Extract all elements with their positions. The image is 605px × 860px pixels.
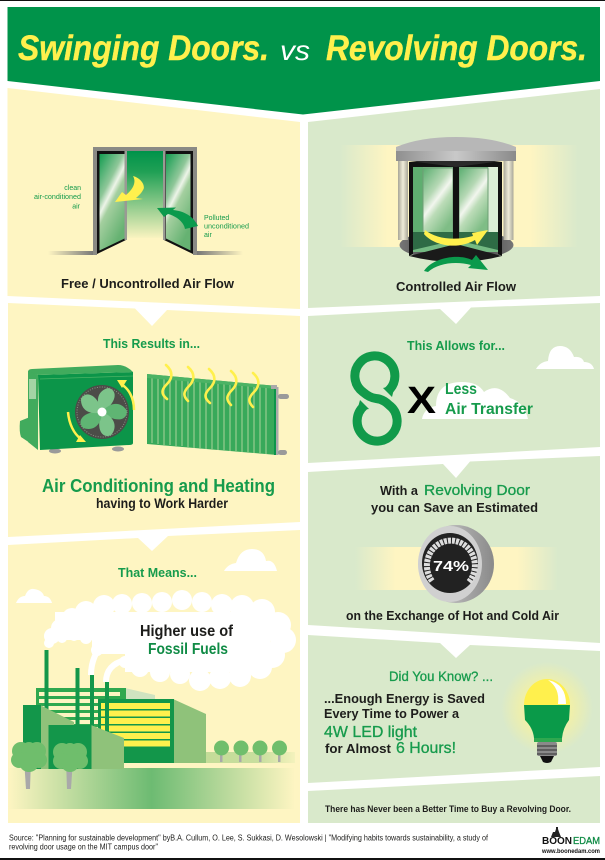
subheading: This Allows for... [407,338,505,353]
text: every time: Every Time to Power a [324,706,460,721]
label: polluted air: air [204,232,212,239]
text: air transfer: Air Transfer [445,401,533,418]
icon: swinging doors [48,147,243,255]
arrow: yellow flow [424,230,488,246]
text: for almost: for Almost [325,741,392,756]
subheading: That Means... [118,565,197,580]
logo: boon edam: BOON [542,836,572,847]
text: 6 hours: 6 Hours! [396,740,456,757]
source note: Source: "Planning for sustainable development" byB.A. Cullum, O. Lee, S. Sukkasi, D. Wesolowski | "Modifying habits towards sustainability, a study of [9,834,489,842]
text: revolving door: Revolving Door [424,482,530,499]
caption: Controlled Air Flow [396,279,517,294]
header banner [8,7,600,114]
multiplication sign: X [407,380,437,422]
cloud: top left [16,589,52,603]
icon: radiator [147,365,289,455]
label: clean air: air [72,204,81,210]
label: clean air: clean [64,185,81,192]
panel: that means [8,530,300,823]
caption: Free / Uncontrolled Air Flow [61,276,235,291]
panel: did you know [308,635,600,783]
title: swinging doors: Swinging Doors. [18,29,269,68]
text: on the exchange: on the Exchange of Hot and Cold Air [346,608,559,623]
text: higher use of: Higher use of [140,623,234,640]
subheading: Did You Know? ... [389,669,493,684]
icon: 74 percent dial: 74% [433,558,469,575]
heat waves [162,365,258,407]
arrows: fan rotation [121,384,134,410]
logo: boon edam: EDAM [573,836,600,847]
cloud: top right [224,549,277,571]
text: with a: With a [380,483,419,498]
logo: boon edam [541,827,600,855]
text: less: Less [445,381,477,398]
panel: this results in [8,303,300,537]
text: you can save: you can Save an Estimated [371,500,538,515]
panel: closing statement [308,776,600,823]
arrow: clean air out [115,176,144,202]
text: better time: There has Never been a Better Time to Buy a Revolving Door. [325,804,571,815]
label: polluted air: Polluted [204,215,229,222]
text: 4W LED light: 4W LED light [324,724,418,741]
cloud: behind text [422,382,528,419]
text: fossil fuels: Fossil Fuels [148,641,228,658]
icon: 74 percent dial [418,525,494,603]
text: having to work harder: having to Work Harder [96,496,229,511]
label: polluted air [204,215,249,239]
subheading: This Results in... [103,336,200,351]
icon: air conditioner [20,365,134,454]
source note [9,834,489,852]
title: vs: vs [280,35,310,66]
illustration: factory [8,650,295,809]
panel: controlled air flow [308,89,600,308]
label: polluted air: unconditioned [204,224,249,230]
panel: free uncontrolled air flow [8,88,300,309]
panel: save an estimated [308,456,600,643]
trees: foreground [11,742,88,789]
logo: boon edam: www.boonedam.com [541,849,600,855]
panel: this allows for [308,303,600,463]
icon: revolving door [396,137,516,272]
label: clean air [34,185,81,210]
smoke cloud [44,590,296,691]
label: clean air: air-conditioned [34,194,81,201]
trees: background row [214,740,287,762]
text: enough energy: ...Enough Energy is Saved [324,691,485,706]
cloud: top right [536,346,594,369]
source note: revolving door usage on the MIT campus door" [9,842,158,852]
icon: led bulb [501,662,593,763]
arrow: polluted air in [157,208,198,229]
arrow: green flow [424,255,488,272]
icon: eight made of arrows [355,356,397,441]
heading: air conditioning and heating: Air Conditioning and Heating [42,476,275,496]
